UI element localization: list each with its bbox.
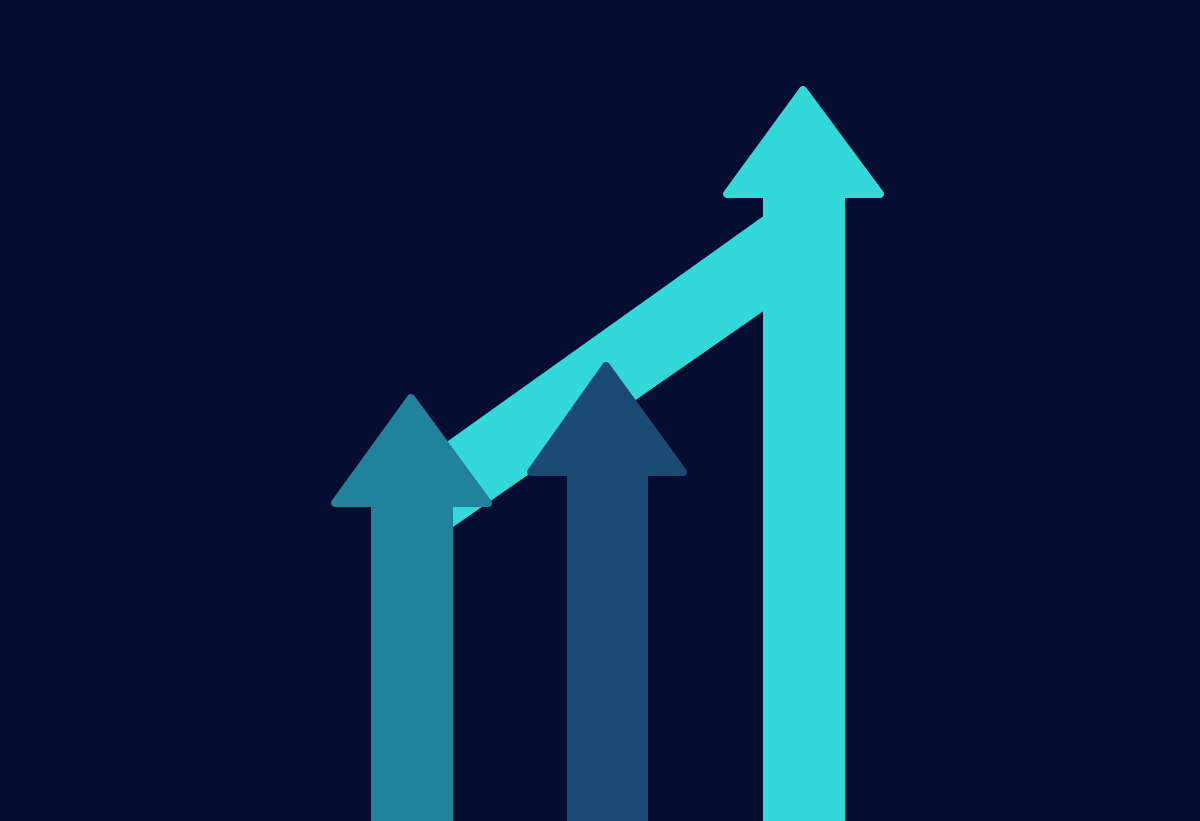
arrow: diagonal cyan trend band (420, 215, 765, 550)
arrow: middle dark blue arrow (531, 366, 683, 821)
arrow: left teal arrow (335, 398, 488, 821)
arrow: right bright cyan arrow (727, 90, 880, 821)
